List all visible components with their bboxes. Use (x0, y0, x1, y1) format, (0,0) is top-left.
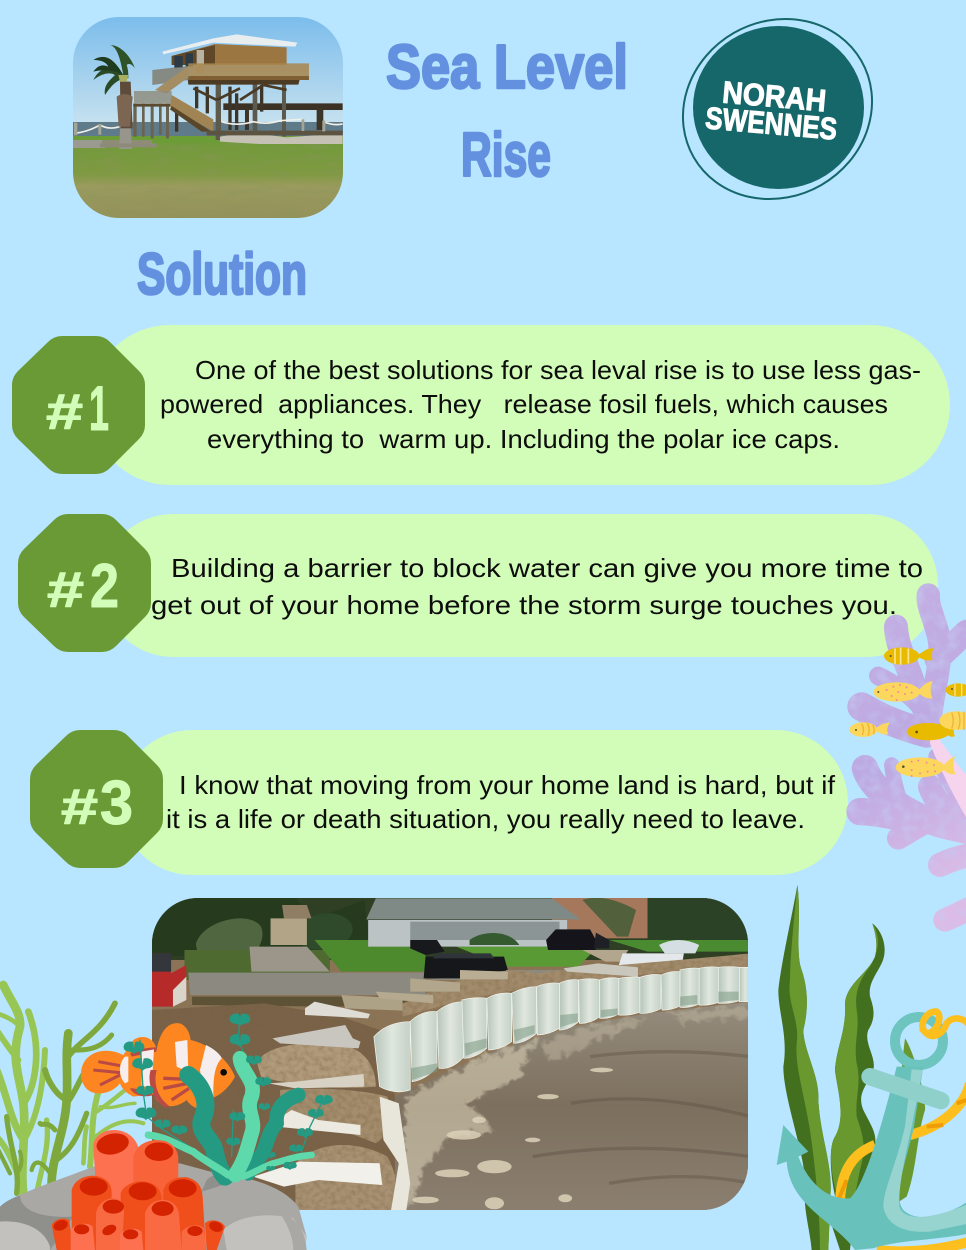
logo: author badge: SWENNES (704, 100, 838, 147)
text 1 (160, 355, 921, 454)
anchor (777, 1017, 966, 1250)
illustration: seaweed and anchor (777, 885, 966, 1250)
badge 1: # (46, 384, 83, 440)
illustration: purple coral with yellow fish (849, 595, 966, 963)
title: Rise (461, 121, 551, 190)
sand bank (152, 953, 751, 1212)
pill 2 (102, 514, 938, 657)
rock (0, 1163, 307, 1250)
photo: stilt house on the coast (73, 17, 343, 218)
badge 2: 2 (90, 552, 119, 621)
seaweed (778, 885, 925, 1250)
panel: solution 1 (12, 325, 950, 485)
illustration: reef with clownfish, seaweed and coral (0, 985, 333, 1250)
water (395, 1002, 751, 1212)
mint and teal plant (140, 1017, 325, 1177)
text 1: powered appliances. They release fosil fuels, which causes (160, 389, 888, 419)
back clownfish (81, 1037, 160, 1097)
photo: sandbag barrier against floodwater (150, 897, 751, 1213)
title (386, 33, 628, 190)
sandbag wall (374, 967, 751, 1092)
anchor rope behind (840, 1083, 966, 1250)
badge 3: # (61, 779, 98, 835)
text 2 (151, 553, 923, 620)
text 3: it is a life or death situation, you really need to leave. (166, 804, 805, 834)
white and tan bags (253, 963, 638, 1187)
badge 1 (12, 336, 145, 474)
logo: author badge: NORAH (721, 75, 828, 118)
heading: Solution: Solution (137, 242, 307, 307)
green kelp (0, 985, 143, 1193)
logo: author badge (650, 0, 905, 233)
fish (849, 647, 966, 777)
panel: solution 3 (30, 730, 848, 875)
text 1: everything to warm up. Including the polar ice caps. (207, 424, 840, 454)
front clownfish (149, 1023, 235, 1109)
badge 3 (30, 730, 163, 868)
text 1: One of the best solutions for sea leval rise is to use less gas- (195, 355, 921, 385)
plant leaves (124, 1013, 333, 1171)
text 2: Building a barrier to block water can give you more time to (171, 553, 923, 583)
badge 3: 3 (100, 769, 133, 838)
title: Sea Level (386, 33, 628, 102)
badge 1: 1 (89, 374, 109, 444)
badge 2 (18, 514, 151, 652)
text 2: get out of your home before the storm surge touches you. (151, 590, 897, 620)
pill 1 (90, 325, 950, 485)
text 3 (166, 770, 836, 834)
rope knot (923, 1012, 966, 1036)
text 3: I know that moving from your home land is hard, but if (179, 770, 836, 800)
panel: solution 2 (18, 514, 938, 657)
orange tube coral (52, 1130, 225, 1250)
badge 2: # (47, 562, 84, 618)
pill 3 (120, 730, 848, 875)
